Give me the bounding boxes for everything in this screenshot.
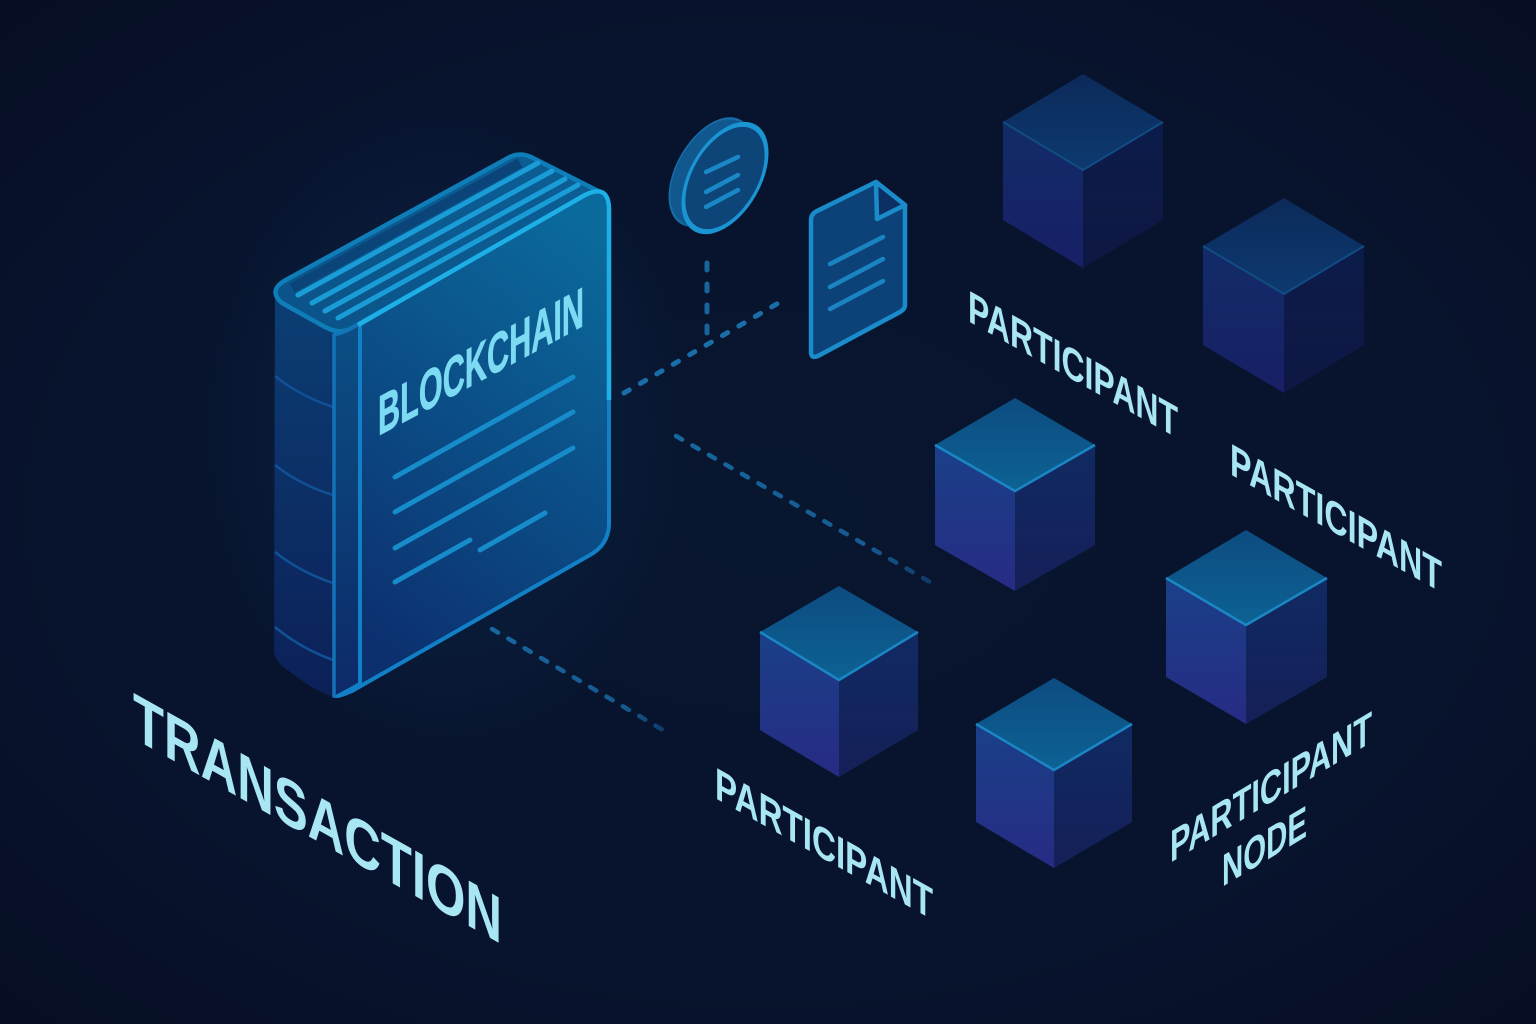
icon: blockchain ledger book	[274, 154, 609, 697]
label: participant node: PARTICIPANT	[1170, 702, 1372, 873]
cube: lower left participant	[760, 586, 918, 777]
label: transaction: TRANSACTION	[133, 679, 502, 960]
label: participant node	[1170, 702, 1372, 897]
cube: lower participant	[976, 678, 1132, 868]
label: participant node: NODE	[1222, 796, 1307, 897]
label: participant top: PARTICIPANT	[968, 281, 1178, 449]
connector: book to document dashed line	[624, 298, 787, 393]
icon: coin	[669, 100, 767, 250]
label: participant right: PARTICIPANT	[1230, 434, 1442, 603]
icon: document	[811, 182, 905, 357]
cube: upper participant 1	[1003, 74, 1163, 268]
book spine	[274, 295, 335, 697]
book front cover	[338, 191, 609, 696]
book top pages	[275, 154, 600, 331]
book hinge	[334, 323, 360, 696]
connector: coin dashed line	[704, 263, 710, 335]
book title: BLOCKCHAIN	[378, 275, 584, 448]
spine bands	[275, 376, 333, 660]
cube: right participant	[1166, 530, 1327, 724]
label: participant bottom: PARTICIPANT	[715, 758, 933, 930]
cube: centre participant	[935, 398, 1095, 591]
cube: upper participant 2	[1203, 198, 1364, 393]
book text lines	[395, 377, 573, 582]
connector: book to middle node dashed line	[676, 436, 930, 582]
connector: book to lower node dashed line	[492, 629, 668, 733]
